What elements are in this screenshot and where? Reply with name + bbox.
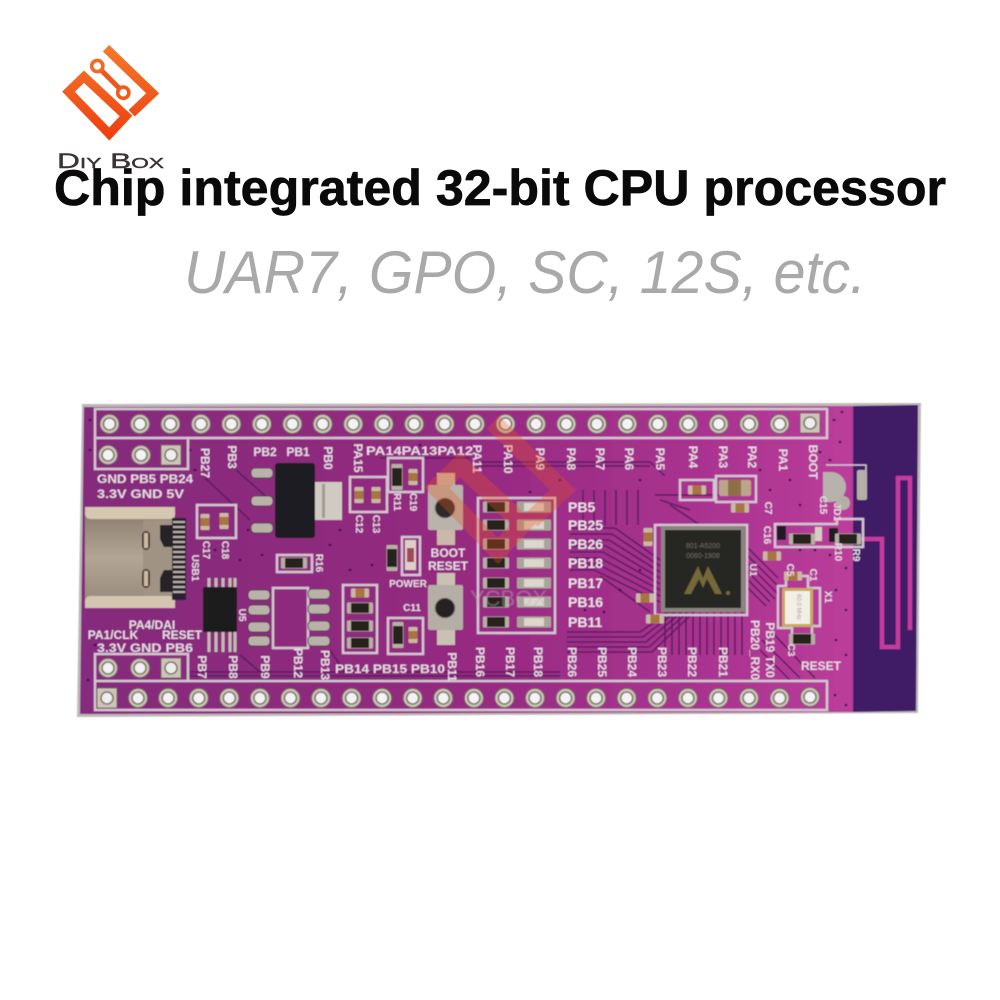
board surface <box>80 406 853 714</box>
silkscreen labels: bottom rotated: PB9 <box>258 655 272 679</box>
silkscreen labels: PB resistor column <box>568 499 603 630</box>
development board <box>77 403 921 717</box>
silkscreen labels: bottom rotated: PB8 <box>226 655 240 679</box>
silkscreen labels: lower left: USB1 <box>189 555 200 582</box>
auxiliary pins <box>98 445 181 678</box>
silkscreen labels: buttons and component designators: C19 <box>407 493 418 512</box>
silkscreen labels: top rotated: PA2 <box>745 446 759 469</box>
silkscreen labels: bottom rotated: PB7 <box>195 655 209 679</box>
faint logo watermark <box>437 422 563 551</box>
silkscreen labels: top rotated: PA5 <box>653 448 667 471</box>
faint wordmark watermark: YCBOX <box>470 586 547 611</box>
small passives near MCU <box>636 476 815 644</box>
silkscreen labels: buttons and component designators: U1 <box>747 564 758 577</box>
capacitors C17 C18 <box>197 505 236 538</box>
silkscreen labels: top rotated: PA8 <box>564 448 578 471</box>
silkscreen labels: buttons and component designators: POWER <box>389 579 428 590</box>
silkscreen labels: lower left: RESET <box>162 628 203 642</box>
silkscreen labels: bottom rotated: PB22 <box>685 647 699 677</box>
silkscreen labels: buttons and component designators: X1 <box>822 591 833 604</box>
logo: Diy Box <box>57 48 164 173</box>
silkscreen labels: buttons and component designators: C11 <box>403 603 421 614</box>
silkscreen labels: buttons and component designators: BOOT <box>431 546 466 560</box>
silkscreen labels: buttons and component designators: C12 <box>353 515 364 534</box>
vias <box>87 411 847 706</box>
silkscreen labels: buttons and component designators: C7 <box>762 502 773 515</box>
silkscreen labels: buttons and component designators: C13 <box>370 515 381 534</box>
copper traces <box>190 458 815 680</box>
resistor array <box>478 498 555 633</box>
silkscreen labels: lower left: 3.3V GND PB6 <box>97 641 193 655</box>
title: Chip integrated 32-bit CPU processor <box>54 160 946 216</box>
silkscreen labels: buttons and component designators: JD1 <box>831 503 842 522</box>
R11 and C19 <box>388 458 423 492</box>
silkscreen labels: top rotated: PA1 <box>776 449 790 472</box>
silkscreen labels: top rotated <box>198 443 820 480</box>
silkscreen labels: top rotated: PB3 <box>225 445 239 469</box>
silkscreen labels: bottom rotated: PB23 <box>655 647 669 677</box>
silkscreen labels: top rotated: PA4 <box>686 446 700 469</box>
silkscreen labels: bottom rotated: PB16 <box>473 647 487 677</box>
pin header outlines <box>95 409 827 710</box>
RESET button <box>428 573 463 645</box>
silkscreen labels: buttons and component designators <box>200 493 861 657</box>
silkscreen labels: bottom rotated: PB25 <box>595 647 609 677</box>
silkscreen labels: buttons and component designators: R16 <box>313 554 324 573</box>
silkscreen labels: PB resistor column: PB16 <box>568 594 603 610</box>
silkscreen labels: buttons and component designators: C15 <box>817 496 828 515</box>
silkscreen labels: buttons and component designators: C3 <box>785 644 796 657</box>
silkscreen labels: top horizontal: GND PB5 PB24 <box>97 472 193 486</box>
BOOT button <box>428 473 463 545</box>
passive group <box>343 585 377 653</box>
silkscreen labels: buttons and component designators: R9 <box>850 549 861 562</box>
silkscreen labels: bottom rotated: PB11 <box>445 652 459 682</box>
silkscreen labels: lower left: U5 <box>236 609 247 622</box>
silkscreen labels: buttons and component designators: C18 <box>219 541 230 560</box>
silkscreen labels: top horizontal: PA14PA13PA12 <box>366 444 473 458</box>
silkscreen labels: buttons and component designators: C17 <box>200 541 211 560</box>
top pin row <box>100 413 820 434</box>
silkscreen labels: bottom rotated: PB19 TX0 <box>763 622 777 678</box>
silkscreen labels: top horizontal: PB1 <box>286 445 310 459</box>
silkscreen labels: buttons and component designators: R11 <box>391 493 402 511</box>
silkscreen labels: PB resistor column: PB5 <box>568 499 595 515</box>
microcontroller: 0060-1908 <box>686 553 720 560</box>
silkscreen labels: bottom rotated: PB26 <box>565 647 579 677</box>
silkscreen labels: top rotated: PA7 <box>593 448 607 471</box>
subtitle: UAR7, GPO, SC, 12S, etc. <box>184 239 866 306</box>
silkscreen labels: bottom rotated: PB18 <box>531 647 545 677</box>
silkscreen labels: PB resistor column: PB25 <box>568 517 603 533</box>
R and C11 lower pair <box>388 618 423 654</box>
silkscreen labels: bottom rotated: PB17 <box>503 647 517 677</box>
silkscreen labels: top horizontal <box>97 444 473 501</box>
silkscreen labels: buttons and component designators: R10 <box>832 543 843 562</box>
microcontroller <box>655 525 747 615</box>
R1 and power LED <box>386 537 420 575</box>
RF matching network <box>775 519 863 547</box>
silkscreen labels: bottom rotated: PB24 <box>625 647 639 677</box>
silkscreen labels: PB resistor column: PB11 <box>568 614 602 630</box>
silkscreen labels: top horizontal: PB2 <box>253 445 277 459</box>
silkscreen labels: bottom rotated: PB21 <box>716 647 730 677</box>
resistor R16 <box>277 555 312 572</box>
antenna panel <box>853 405 918 712</box>
silkscreen labels: lower left: PA1/CLK <box>88 628 139 642</box>
silkscreen labels: top rotated: PA10 <box>501 444 515 474</box>
silkscreen labels: top rotated: PA9 <box>533 448 547 471</box>
silkscreen labels: PB resistor column: PB17 <box>568 575 603 591</box>
silkscreen labels: buttons and component designators: C16 <box>761 526 772 545</box>
silkscreen labels: buttons and component designators: C5 <box>784 564 795 577</box>
logo wordmark: Diy Box <box>57 150 164 173</box>
bottom pin row <box>97 687 820 708</box>
board edge and substrate <box>77 403 921 717</box>
silkscreen labels: buttons and component designators: RESET <box>428 559 469 573</box>
silkscreen labels: bottom rotated: PB20_RX0 <box>748 620 762 680</box>
logo mark <box>68 48 153 134</box>
silkscreen labels: bottom rotated: PB12 <box>291 648 305 678</box>
silkscreen labels: buttons and component designators: C1 <box>807 569 818 582</box>
silkscreen labels: top rotated: PA6 <box>622 448 636 471</box>
silkscreen labels: top rotated: PA3 <box>716 446 730 469</box>
capacitors C12 C13 <box>350 477 387 512</box>
microcontroller: 801-A5200 <box>686 543 720 550</box>
silkscreen labels: lower left: PA4/DAI <box>129 618 175 632</box>
antenna jumper pads <box>823 465 867 510</box>
silkscreen labels: bottom rotated: PB13 <box>318 650 332 680</box>
voltage regulator <box>251 463 342 538</box>
antenna trace <box>845 478 910 647</box>
silkscreen labels: top rotated: PA15 <box>351 443 365 473</box>
silkscreen labels: top rotated: PA11 <box>470 445 484 474</box>
silkscreen labels: bottom rotated <box>195 620 842 682</box>
silkscreen labels: top rotated: PB0 <box>321 446 335 470</box>
silkscreen labels: bottom rotated: RESET <box>801 659 842 673</box>
silkscreen labels: bottom rotated: PB14 PB15 PB10 <box>335 662 445 676</box>
silkscreen labels: lower left <box>88 555 247 655</box>
USB-C connector <box>85 507 186 608</box>
silkscreen labels: PB resistor column: PB26 <box>568 536 603 552</box>
crystal oscillator: 60.0 MHz <box>795 594 801 620</box>
silkscreen labels: top rotated: PB27 <box>198 448 212 478</box>
crystal oscillator <box>778 576 820 642</box>
IC U5 <box>203 578 237 652</box>
silkscreen labels: PB resistor column: PB18 <box>568 555 603 571</box>
IC U2 footprint <box>248 588 330 648</box>
silkscreen labels: top horizontal: 3.3V GND 5V <box>97 487 184 501</box>
silkscreen labels: top rotated: BOOT <box>806 445 820 480</box>
